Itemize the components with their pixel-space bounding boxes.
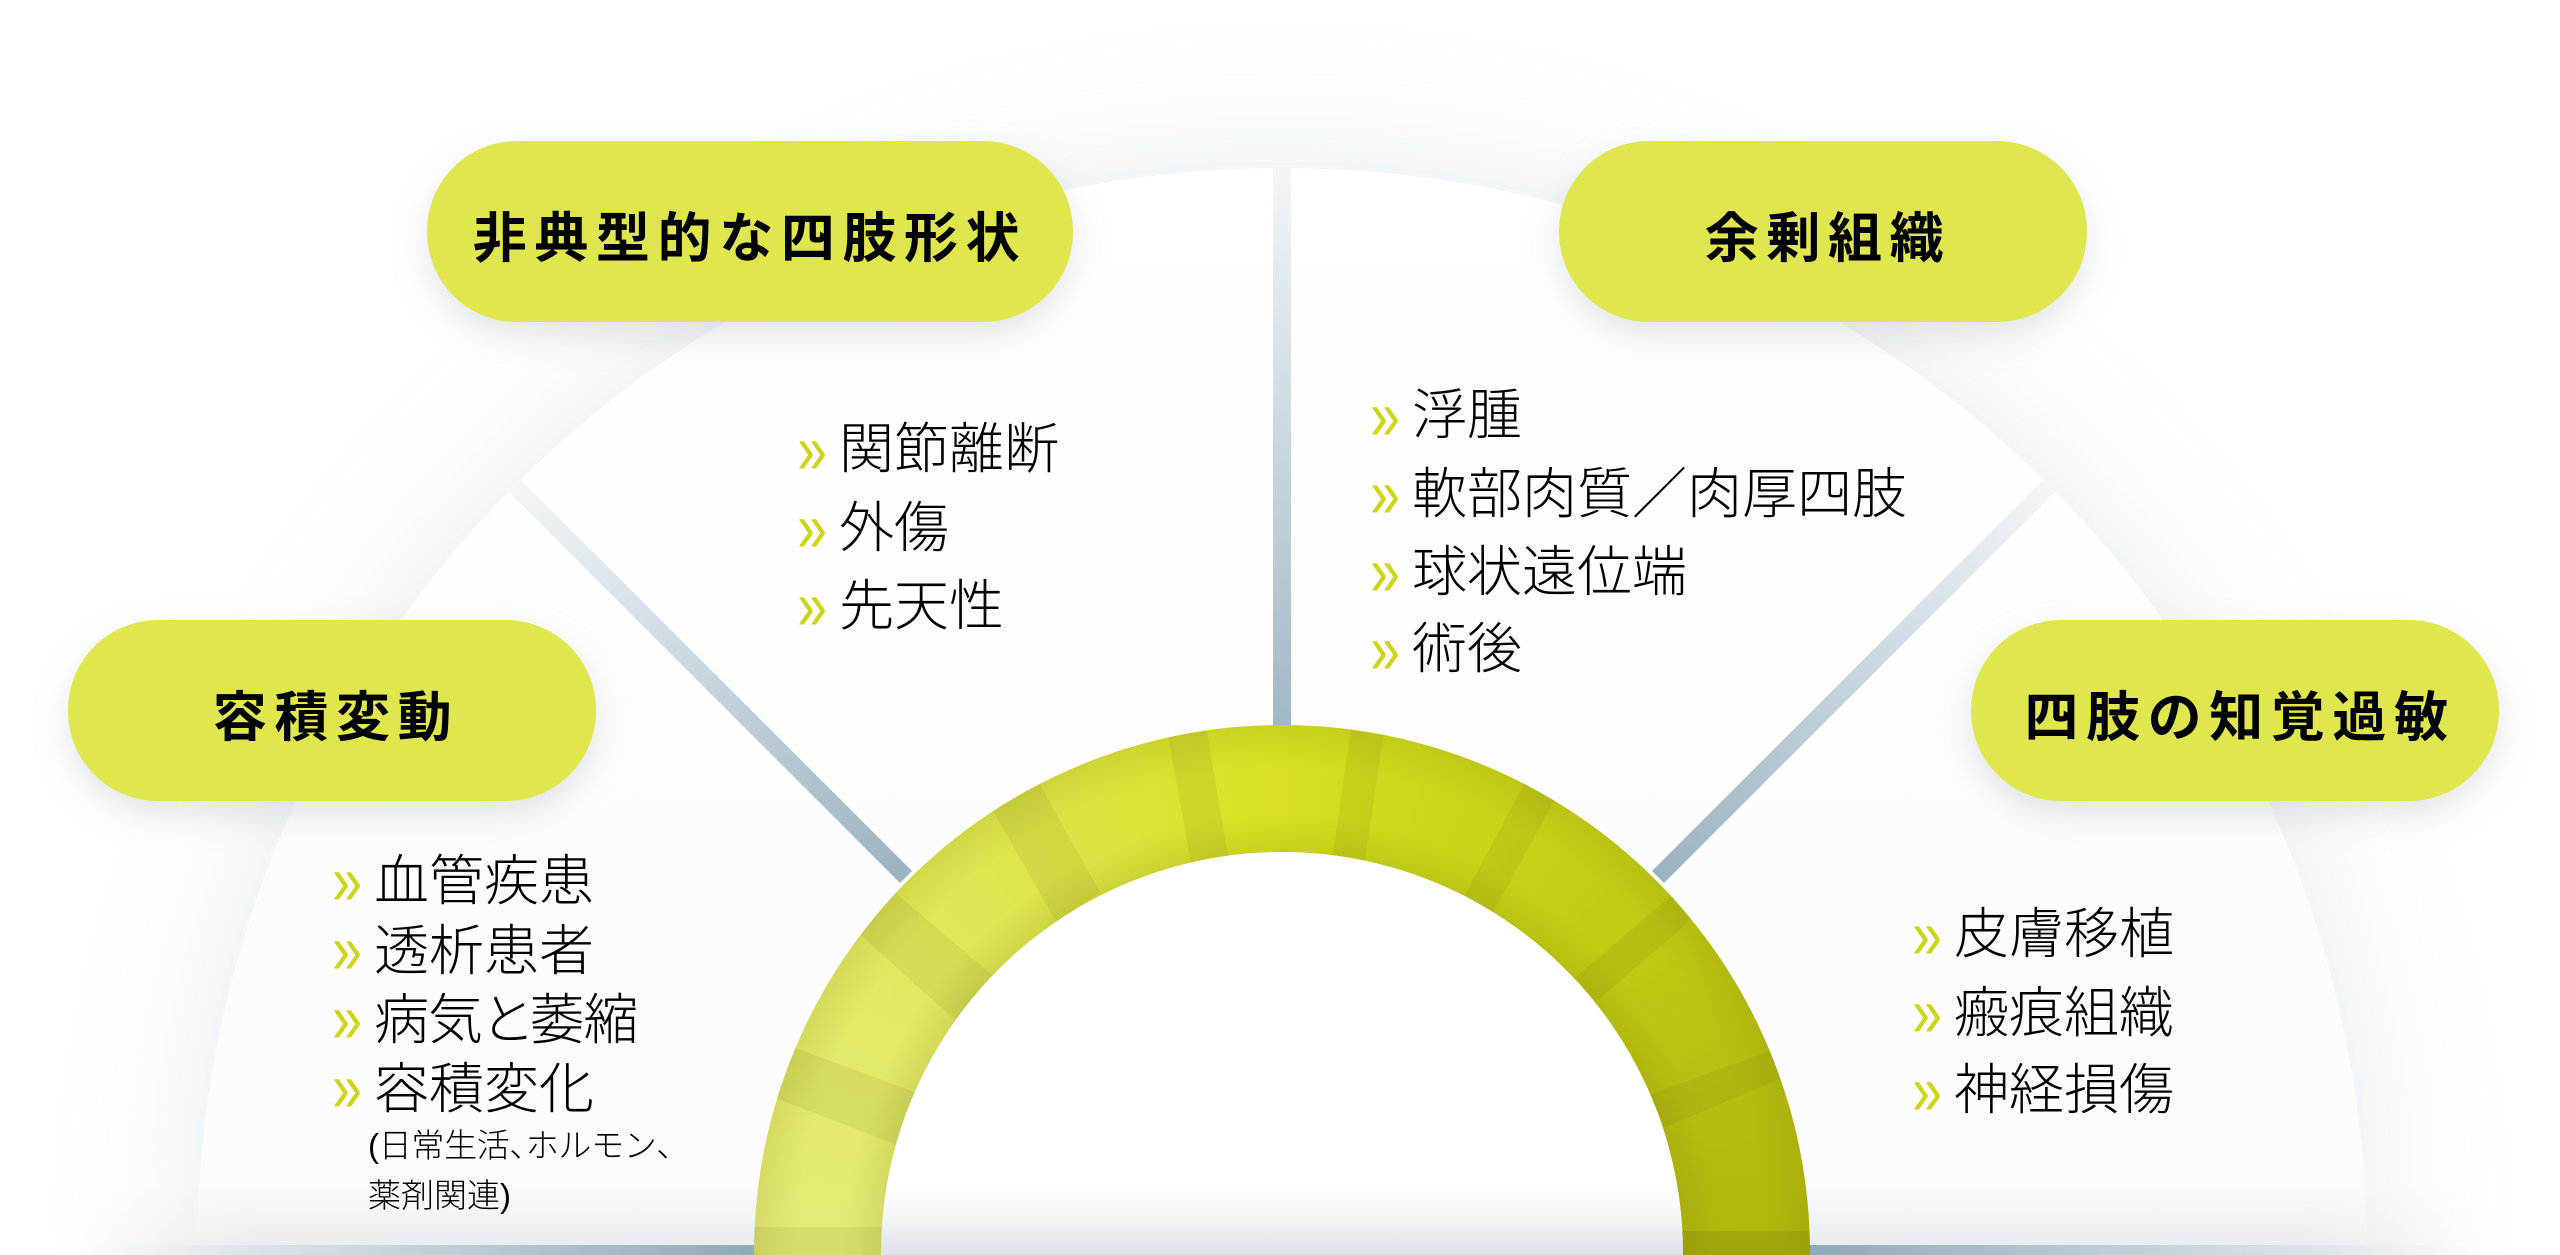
heading pill: 四肢の知覚過敏: 四肢の知覚過敏 [2024, 673, 2456, 752]
heading pill: 容積変動: 容積変動 [213, 673, 459, 752]
note: 日常生活、ホルモン、薬剤関連 [368, 1127, 673, 1214]
item: 皮膚移植: 皮膚移植 [1954, 889, 2174, 969]
item: 術後: 術後 [1412, 604, 1522, 684]
item: 先天性: 先天性 [839, 561, 1004, 641]
item: 透析患者: » [332, 911, 362, 989]
item: 軟部肉質/肉厚四肢: 軟部肉質／肉厚四肢 [1412, 449, 1907, 529]
list: excess tissue causes [1370, 370, 1907, 689]
heading pill: 余剰組織 [1559, 141, 2087, 322]
item: 関節離断: 関節離断 [839, 404, 1059, 484]
item: 関節離断: » [797, 411, 827, 489]
item: 病気と萎縮: » [332, 980, 362, 1058]
baseline strips [110, 1245, 2450, 1255]
item: 病気と萎縮: 病気と萎縮 [374, 975, 637, 1055]
heading pill: 非典型的な四肢形状: 非典型的な四肢形状 [473, 194, 1027, 273]
heading pill: 余剰組織: 余剰組織 [1705, 194, 1951, 273]
item: 容積変化: » [332, 1049, 362, 1127]
panel: semicircular fan with dividers [200, 168, 2364, 1223]
list: atypical limb shape causes [797, 404, 1059, 645]
item: 瘢痕組織: 瘢痕組織 [1954, 968, 2174, 1048]
ring: segmented lime arc [754, 725, 1810, 1255]
item: 皮膚移植: » [1912, 896, 1942, 974]
item: 外傷: 外傷 [839, 483, 949, 563]
item: 浮腫: 浮腫 [1412, 370, 1522, 450]
item: 瘢痕組織: » [1912, 974, 1942, 1052]
item: 術後: » [1370, 611, 1400, 689]
note: 日常生活、ホルモン、薬剤関連: 薬剤関連) [368, 1177, 511, 1214]
item: 球状遠位端: 球状遠位端 [1412, 527, 1687, 607]
note: 日常生活、ホルモン、薬剤関連: (日常生活、ホルモン、 [368, 1127, 673, 1164]
list: limb hypersensitivity causes [1912, 889, 2174, 1130]
heading pill: 非典型的な四肢形状 [427, 141, 1073, 322]
item: 外傷 [797, 483, 949, 567]
item: 球状遠位端: » [1370, 533, 1400, 611]
list: volume change causes [332, 836, 673, 1214]
item: 血管疾患: 血管疾患 [374, 836, 594, 916]
item: 軟部肉質/肉厚四肢: » [1370, 455, 1400, 533]
heading pill: 容積変動 [68, 620, 596, 801]
item: 容積変化: 容積変化 [374, 1044, 594, 1124]
item: 術後 [1370, 604, 1522, 689]
item: 神経損傷: » [1912, 1052, 1942, 1130]
item: 透析患者: 透析患者 [374, 906, 594, 986]
bottom soft shading [138, 1211, 2412, 1245]
item: 神経損傷: 神経損傷 [1954, 1045, 2174, 1125]
item: 浮腫 [1370, 370, 1522, 455]
item: 浮腫: » [1370, 377, 1400, 455]
ring band overlays and inner disc [754, 730, 1810, 1255]
heading pill: 四肢の知覚過敏 [1971, 620, 2499, 801]
item: 外傷: » [797, 489, 827, 567]
item: 血管疾患: » [332, 842, 362, 920]
item: 先天性: » [797, 567, 827, 645]
